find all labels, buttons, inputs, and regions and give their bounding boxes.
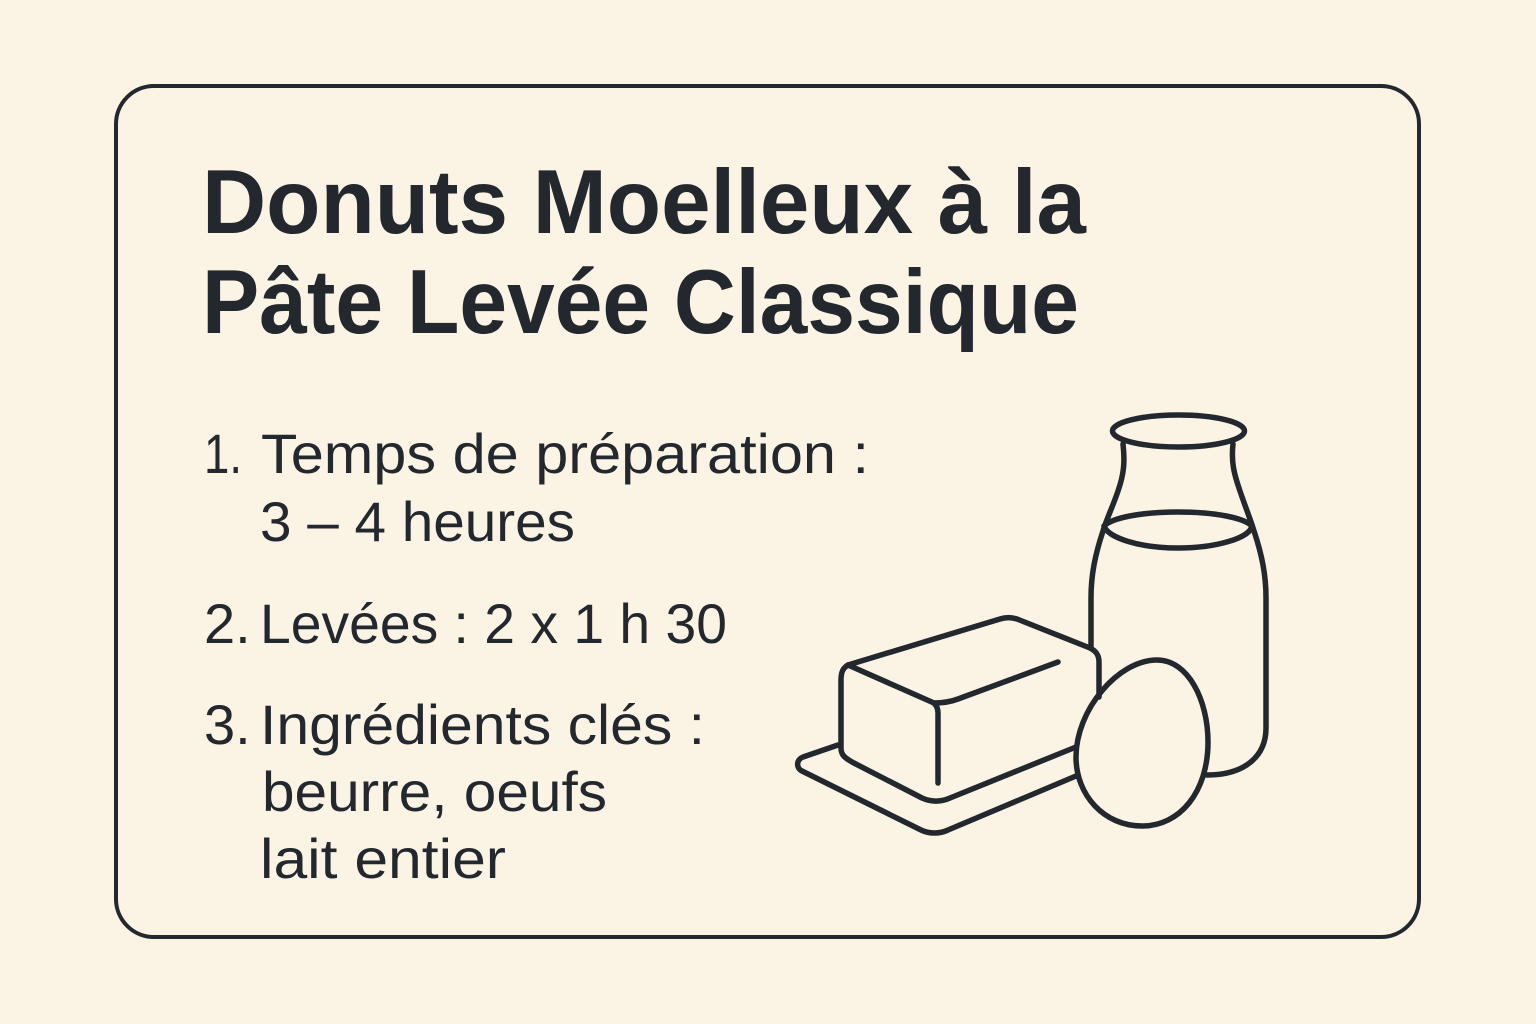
title: Pâte Levée Classique	[202, 252, 1079, 353]
list item 1: preparation time: 1.	[204, 422, 242, 485]
list item 3: key ingredients: Ingrédients clés :	[260, 693, 705, 756]
list item 3: key ingredients: beurre, oeufs	[262, 760, 607, 823]
icon: butter block	[841, 618, 1099, 801]
list item 3: key ingredients: 3.	[204, 693, 251, 756]
icon: egg	[1076, 660, 1208, 826]
panel: recipe card	[116, 86, 1419, 937]
list item 1: preparation time	[204, 422, 869, 553]
icon: milk bottle, butter and egg	[798, 415, 1266, 833]
icon: butter dish	[798, 745, 1076, 833]
list item 1: preparation time: 3 – 4 heures	[260, 490, 575, 553]
list item 1: preparation time: Temps de préparation :	[261, 422, 869, 485]
list item 3: key ingredients	[204, 693, 705, 890]
icon: milk bottle	[1091, 415, 1266, 775]
list item 2: rising times: 2.	[204, 592, 251, 655]
list item 3: key ingredients: lait entier	[260, 827, 506, 890]
title	[202, 152, 1087, 353]
title: Donuts Moelleux à la	[202, 152, 1087, 253]
list item 2: rising times: Levées : 2 x 1 h 30	[260, 592, 727, 655]
